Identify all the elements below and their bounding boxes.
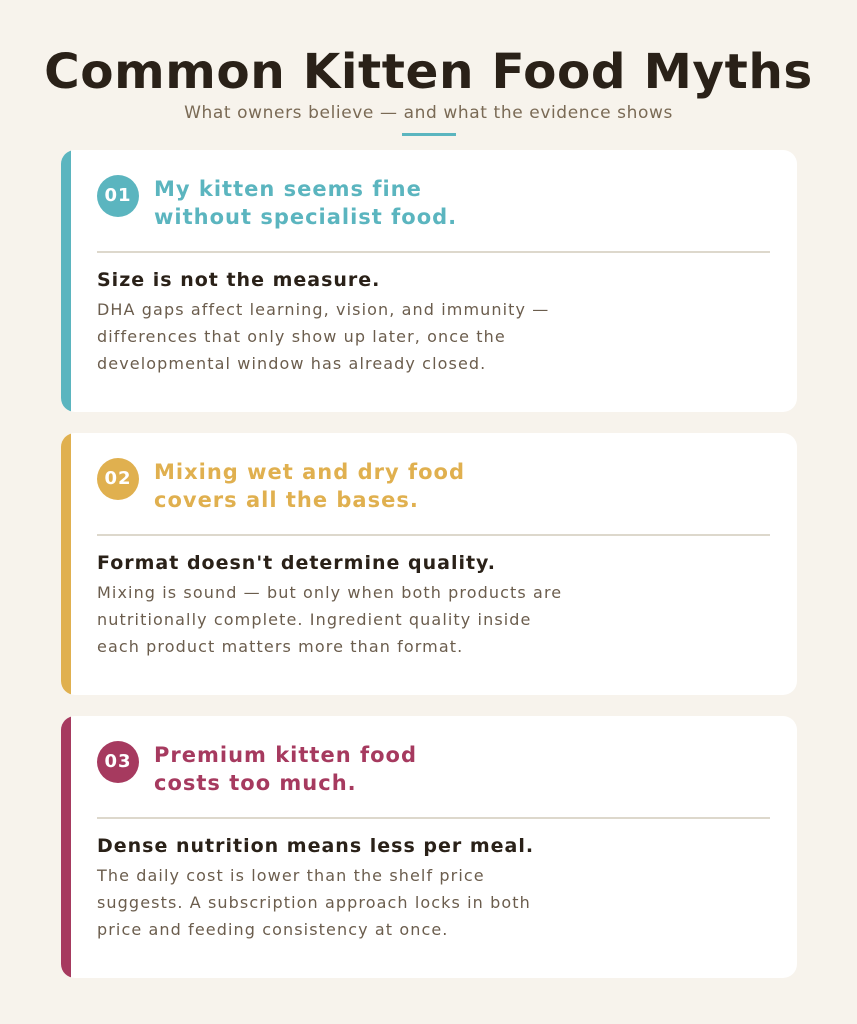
myth heading 01: without specialist food. (154, 205, 457, 229)
icon: number 02 (97, 458, 139, 500)
body 03: The daily cost is lower than the shelf price (97, 866, 485, 885)
myth heading 03: Premium kitten food (154, 743, 417, 767)
icon: number 03 (97, 741, 139, 783)
icon: number 01: 01 (104, 185, 132, 206)
fact heading 02: Format doesn't determine quality. (97, 552, 496, 574)
accent bar (402, 133, 456, 136)
body 01: developmental window has already closed. (97, 354, 486, 373)
myth heading 03: costs too much. (154, 771, 357, 795)
title: Common Kitten Food Myths (44, 44, 813, 100)
body 02: nutritionally complete. Ingredient quality inside (97, 610, 532, 629)
icon: number 01 (97, 175, 139, 217)
fact heading 01: Size is not the measure. (97, 269, 380, 291)
fact heading 03: Dense nutrition means less per meal. (97, 835, 534, 857)
myth heading 01 (154, 177, 457, 229)
panel: myth 01 (61, 150, 797, 412)
myth heading 02: covers all the bases. (154, 488, 419, 512)
icon: number 03: 03 (104, 751, 132, 772)
myth heading 02 (154, 460, 465, 512)
body 03: price and feeding consistency at once. (97, 920, 448, 939)
body 01 (97, 300, 549, 373)
body 01: differences that only show up later, once the (97, 327, 506, 346)
panel: myth 03 (61, 716, 797, 978)
body 03: suggests. A subscription approach locks in both (97, 893, 531, 912)
subtitle: What owners believe — and what the evidence shows (184, 103, 673, 123)
myth heading 02: Mixing wet and dry food (154, 460, 465, 484)
panel: myth 02 (61, 433, 797, 695)
body 02: each product matters more than format. (97, 637, 463, 656)
body 02 (97, 583, 562, 656)
body 01: DHA gaps affect learning, vision, and immunity — (97, 300, 549, 319)
icon: number 02: 02 (104, 468, 132, 489)
body 03 (96, 866, 531, 939)
body 02: Mixing is sound — but only when both products are (97, 583, 562, 602)
myth heading 03 (154, 743, 417, 795)
myth heading 01: My kitten seems fine (154, 177, 422, 201)
